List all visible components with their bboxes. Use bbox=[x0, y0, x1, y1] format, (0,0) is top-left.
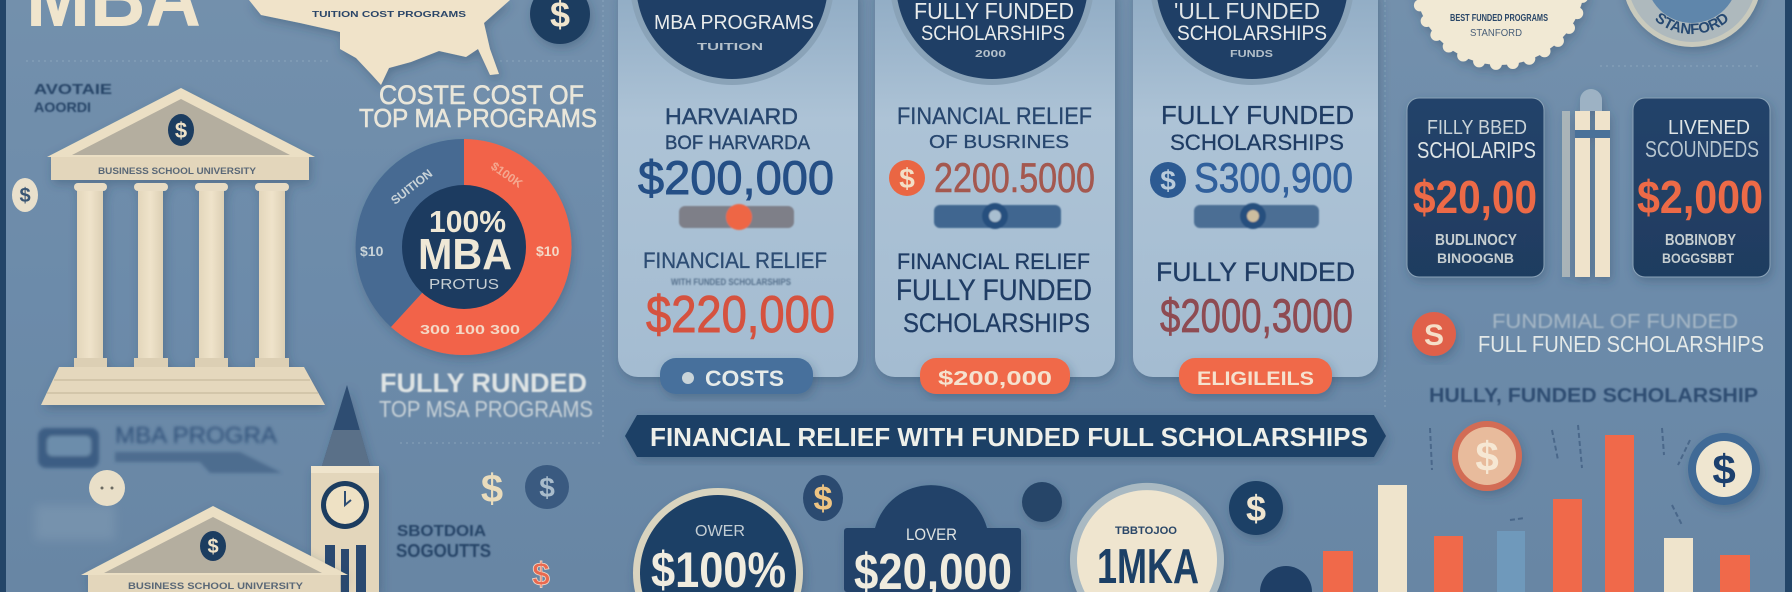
icon: small dollar tag bbox=[12, 178, 38, 212]
icon: cream dollar coin bbox=[1688, 433, 1760, 505]
donut labels: $100K bbox=[488, 159, 526, 191]
badge: MBA programs: TUITION bbox=[697, 42, 763, 53]
icon: orange dollar: $ bbox=[532, 556, 550, 592]
panel: scholarship box 2: LIVENED bbox=[1668, 117, 1750, 139]
panel: scholarship box 1: BINOOGNB bbox=[1437, 250, 1514, 266]
label: stipend scouts bbox=[396, 523, 491, 561]
badge: cream seal: BEST FUNDED PROGRAMS bbox=[1450, 13, 1548, 24]
figure: $220,000 red: $220,000 bbox=[646, 286, 835, 344]
pill: costs bbox=[660, 358, 813, 394]
text: fully funded scholarships: SCHOLARSHIPS bbox=[1170, 130, 1344, 155]
text: financial relief of business: OF BUSRINES bbox=[929, 132, 1069, 152]
panel: card 1 Harvard: WITH FUNDED SCHOLARSHIPS bbox=[671, 277, 791, 287]
pill icon row bbox=[934, 203, 1061, 229]
icon: orange dollar coin bbox=[889, 160, 925, 196]
map of the USA: TUITION COST PROGRAMS bbox=[312, 10, 467, 19]
icon: blue dollar coin: $ bbox=[1160, 165, 1176, 196]
text: financial relief of business: FINANCIAL RELIEF bbox=[897, 103, 1092, 130]
donut labels: $10 bbox=[360, 243, 384, 259]
panel: card 3 scholarships bbox=[1133, 0, 1378, 394]
icon: blue dollar coin bbox=[1150, 162, 1186, 198]
icon: peach dollar coin: $ bbox=[1475, 433, 1499, 480]
heading: cost of top MBA programs: TOP MA PROGRAMS bbox=[359, 103, 597, 133]
text stack: funded scholarships: FINANCIAL RELIEF bbox=[897, 249, 1090, 274]
text stack: funded scholarships: SCHOLARSHIPS bbox=[903, 308, 1090, 338]
icons: dollar pair bbox=[481, 465, 569, 511]
panel: scholarship box 1: BUDLINOCY bbox=[1435, 232, 1517, 249]
heading: fully funded top MBA programs: TOP MSA PROGRAMS bbox=[379, 396, 593, 422]
heading: cost of top MBA programs bbox=[359, 80, 597, 133]
icon: navy button bbox=[1022, 482, 1062, 522]
badge: MBA programs: MBA PROGRAMS bbox=[654, 12, 814, 34]
icon: cream circle bbox=[89, 470, 125, 506]
bar chart bbox=[1323, 435, 1750, 592]
icon: orange dollar coin: $ bbox=[899, 163, 915, 194]
donut labels: 300 100 300 bbox=[420, 322, 520, 337]
panel: scholarship box 2: SCOUNDEDS bbox=[1645, 136, 1759, 162]
badge: cream seal: STANFORD bbox=[1470, 28, 1522, 39]
label: average bbox=[34, 81, 112, 115]
building: large temple: BUSINESS SCHOOL UNIVERSITY bbox=[98, 166, 256, 176]
icon: orange dollar circle: S bbox=[1424, 319, 1444, 352]
heading: fully funded top MBA programs bbox=[379, 368, 593, 422]
banner: financial relief with funded full scholarships: FINANCIAL RELIEF WITH FUNDED FULL SCHOLARSHIPS bbox=[650, 422, 1368, 452]
icon: navy coin bottom bbox=[1260, 566, 1312, 592]
label: stipend scouts: SOGOUTTS bbox=[396, 541, 491, 561]
figure: 2200.5000: 2200.5000 bbox=[934, 154, 1095, 201]
text: full funded scholarships: FUNDMIAL OF FUNDED bbox=[1492, 311, 1738, 333]
panel: card 1 Harvard bbox=[618, 0, 858, 394]
banner: financial relief with funded full scholarships bbox=[625, 415, 1386, 457]
blurred label: fully funded scholarship: HULLY, FUNDED SCHOLARSHIP bbox=[1429, 385, 1758, 407]
icon: navy dollar coin bbox=[1229, 481, 1283, 535]
badge: full funded scholarships: SCHOLARSHIPS bbox=[1177, 22, 1327, 45]
panel: scholarship box 2: BOGGSBBT bbox=[1662, 250, 1734, 266]
blurred label: MBA program bbox=[38, 422, 282, 473]
donut labels: SUITION bbox=[388, 166, 435, 207]
icon: peach dollar coin bbox=[1452, 421, 1522, 491]
icon: dollar coin top bbox=[530, 0, 590, 44]
stat circle: $100%: OWER bbox=[695, 523, 745, 540]
badge: fully funded scholarships: 2000 bbox=[975, 49, 1007, 60]
building: small temple: BUSINESS SCHOOL UNIVERSITY bbox=[128, 581, 303, 591]
panel: scholarship box 1 bbox=[1407, 98, 1544, 277]
panel: scholarship box 1: $20,00 bbox=[1413, 171, 1537, 223]
icon: gold dollar coin: $ bbox=[814, 480, 833, 518]
text: fully funded scholarships: FULLY FUNDED bbox=[1161, 100, 1354, 130]
chart: donut bbox=[356, 139, 572, 355]
icon: orange dollar circle bbox=[1412, 312, 1456, 356]
stat circle: 1MKA: TBBTOJOO bbox=[1115, 525, 1177, 537]
text: Harvard: HARVAIARD bbox=[665, 104, 798, 129]
text stack: funded scholarships: FULLY FUNDED bbox=[896, 274, 1092, 307]
icon: gold dollar coin bbox=[803, 475, 843, 521]
badge: Stanford seal bbox=[1623, 0, 1765, 54]
figure: S300,900: S300,900 bbox=[1194, 154, 1353, 201]
heading: fully funded top MBA programs: FULLY RUNDED bbox=[380, 368, 587, 398]
pill: eligibility: ELIGILEILS bbox=[1197, 369, 1314, 390]
badge: full funded scholarships bbox=[1150, 0, 1354, 85]
pill icon row bbox=[679, 204, 794, 230]
building: small temple: $ bbox=[207, 536, 219, 558]
donut labels: $10 bbox=[536, 243, 560, 259]
building: large temple bbox=[41, 88, 325, 405]
donut labels: 100% bbox=[429, 204, 506, 239]
text: Harvard bbox=[665, 104, 810, 154]
heading: cost of top MBA programs: COSTE COST OF bbox=[379, 80, 584, 110]
panel: scholarship box 2: BOBINOBY bbox=[1665, 232, 1736, 249]
panel: scholarship box 2: $2,000 bbox=[1637, 171, 1763, 223]
pill: eligibility bbox=[1179, 358, 1332, 394]
text: Harvard: BOF HARVARDA bbox=[665, 133, 810, 154]
badge: cream seal bbox=[1415, 0, 1585, 65]
figure: $200,000 blue: $200,000 bbox=[638, 151, 834, 204]
icon: scroll pillar bbox=[1562, 89, 1610, 277]
badge: MBA programs bbox=[630, 0, 834, 85]
donut labels: PROTUS bbox=[429, 276, 499, 293]
stat circle: 1MKA bbox=[1070, 483, 1224, 592]
text: fully funded: FULLY FUNDED bbox=[1156, 257, 1355, 287]
pill: $200,000: $200,000 bbox=[938, 368, 1052, 390]
text stack: funded scholarships bbox=[896, 249, 1092, 338]
map of the USA bbox=[249, 0, 510, 85]
icon: pediment dollar seal: $ bbox=[175, 118, 187, 143]
badge: fully funded scholarships: SCHOLARSHIPS bbox=[921, 22, 1065, 45]
text: financial relief of business bbox=[897, 103, 1092, 152]
panel: scholarship box 2 bbox=[1633, 98, 1770, 277]
badge: full funded scholarships: FUNDS bbox=[1230, 49, 1273, 60]
icons: dollar pair: $ bbox=[539, 472, 555, 503]
label: average: AOORDI bbox=[34, 99, 91, 115]
text: financial relief: FINANCIAL RELIEF bbox=[643, 248, 827, 273]
badge: fully funded scholarships bbox=[890, 0, 1094, 85]
icons: dollar pair: $ bbox=[481, 467, 503, 511]
stat circle: $100% bbox=[633, 488, 803, 592]
clock tower bbox=[311, 385, 379, 592]
icon: pediment dollar seal bbox=[168, 114, 194, 146]
icon: navy dollar coin: $ bbox=[1246, 488, 1266, 529]
stat box: $20,000: LOVER bbox=[906, 525, 957, 544]
label: stipend scouts: SBOTDOIA bbox=[397, 523, 486, 540]
figure: $2000,3000: $2000,3000 bbox=[1160, 289, 1353, 342]
building: small temple bbox=[81, 506, 348, 592]
badge: Stanford seal: STANFORD bbox=[1656, 13, 1728, 34]
stat box: $20,000 bbox=[844, 485, 1021, 592]
pill: $200,000 bbox=[920, 358, 1070, 394]
icon: cream dollar coin: $ bbox=[1712, 446, 1736, 493]
label: average: AVOTAIE bbox=[34, 81, 112, 98]
icon: small dollar tag: $ bbox=[19, 185, 31, 207]
donut labels: MBA bbox=[418, 230, 512, 279]
pill icon row bbox=[1194, 203, 1319, 229]
blurred label: MBA program: MBA PROGRA bbox=[115, 422, 278, 448]
panel: card 2 business bbox=[875, 0, 1115, 394]
donut labels bbox=[360, 159, 560, 337]
panel: scholarship box 1: SCHOLARIPS bbox=[1417, 137, 1536, 163]
panel: scholarship box 1: FILLY BBED bbox=[1427, 117, 1527, 139]
text: fully funded scholarships bbox=[1161, 100, 1354, 155]
pill: costs: COSTS bbox=[705, 366, 784, 391]
text: full funded scholarships bbox=[1478, 311, 1764, 357]
